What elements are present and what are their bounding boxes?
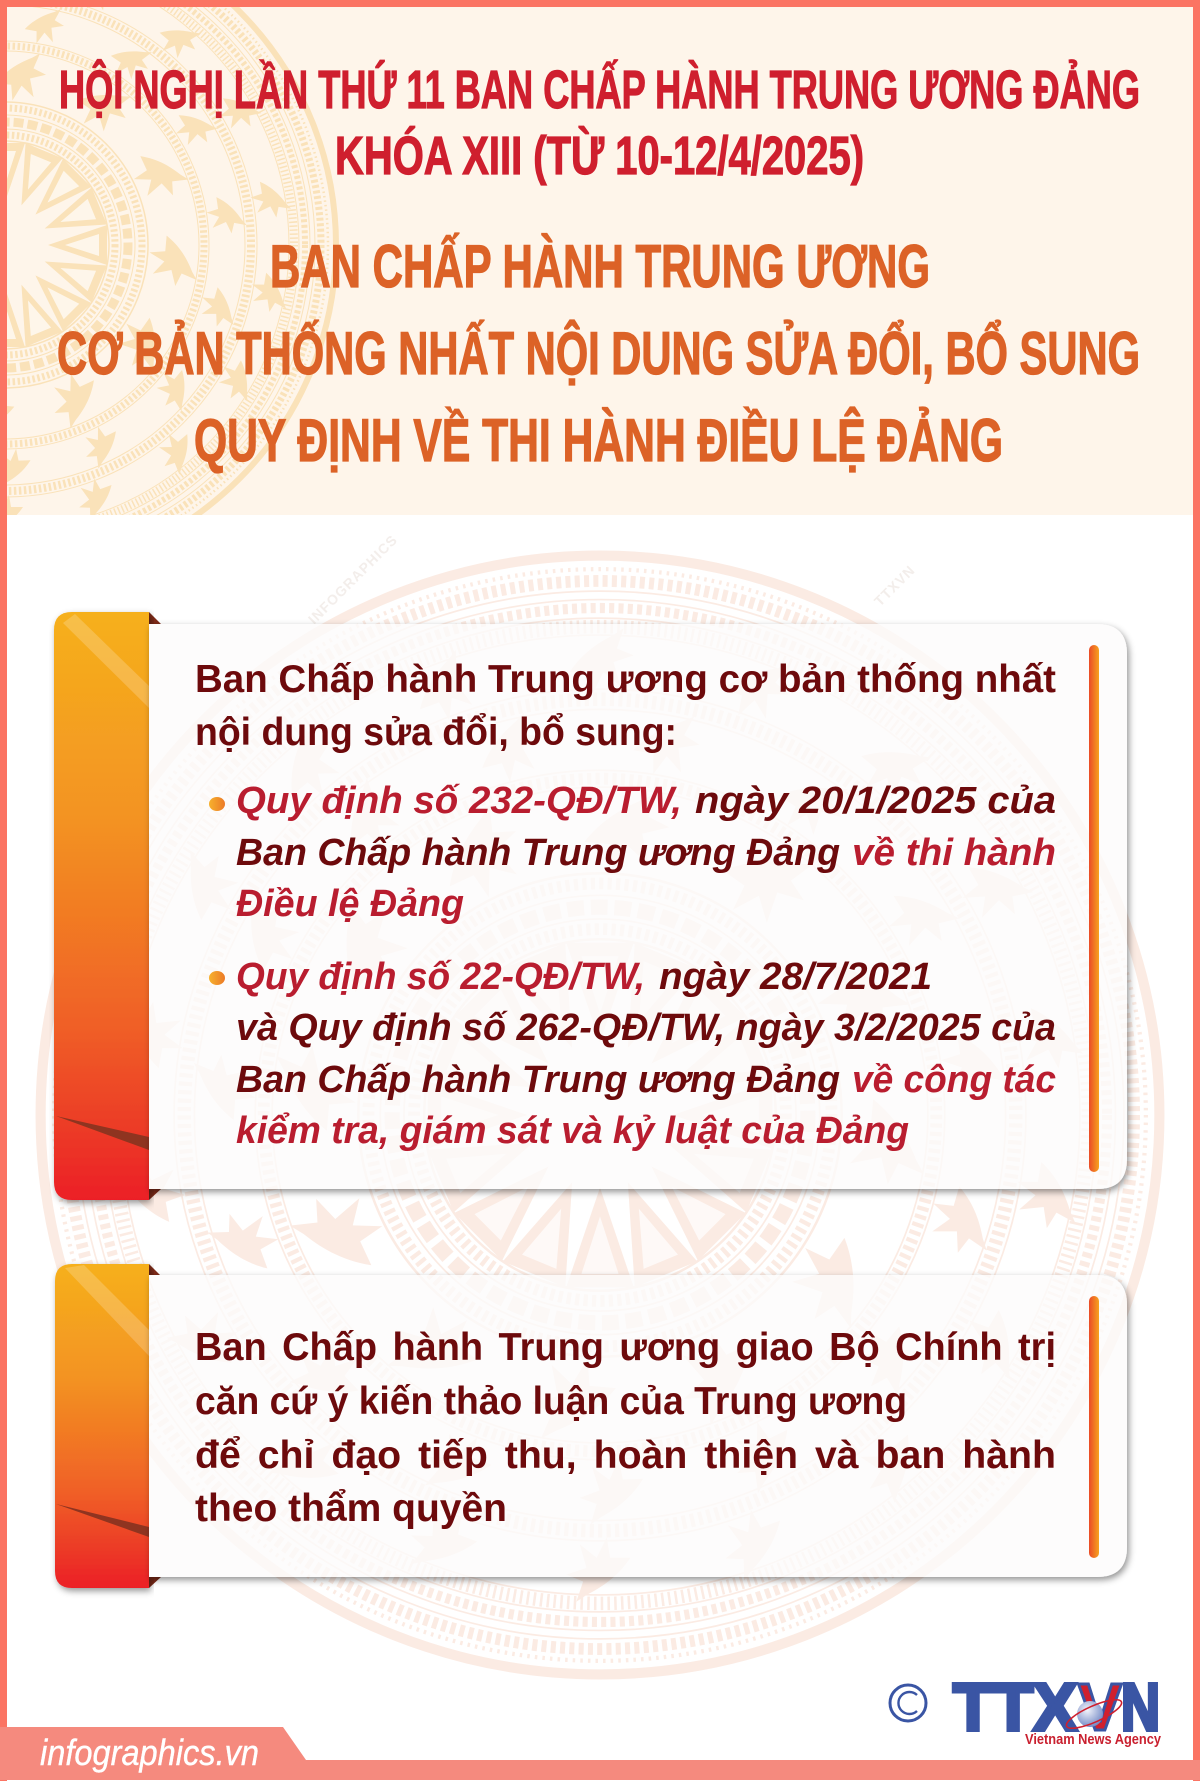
footer site name: infographics.vn — [40, 1732, 259, 1773]
card 2 text: để chỉ đạo tiếp thu, hoàn thiện và ban hành — [195, 1434, 1056, 1477]
card 2 text: Ban Chấp hành Trung ương giao Bộ Chính trị — [195, 1326, 1056, 1369]
heading: conference title — [59, 59, 1140, 186]
bullet 1 — [209, 797, 225, 811]
card 2 text — [195, 1326, 1056, 1530]
bullet 2 text: về công tác — [852, 1059, 1056, 1101]
bullet 1 text: Ban Chấp hành Trung ương Đảng — [236, 832, 840, 874]
card 2 side tab — [55, 1264, 161, 1588]
card 1 side tab — [54, 612, 161, 1200]
bullet 2 text: Quy định số 22-QĐ/TW, — [236, 956, 645, 998]
logo: TTXVN Vietnam News Agency: Vietnam News Agency — [1025, 1732, 1161, 1748]
bullet 1 text: Điều lệ Đảng — [236, 883, 464, 925]
panel: card 1 — [54, 612, 1127, 1200]
watermark labels — [305, 531, 918, 627]
logo: TTXVN Vietnam News Agency — [953, 1670, 1161, 1748]
heading: conference title: KHÓA XIII (TỪ 10-12/4/2025) — [335, 126, 864, 186]
card 1 intro text: Ban Chấp hành Trung ương cơ bản thống nhất — [195, 658, 1056, 701]
card 2 text: căn cứ ý kiến thảo luận của Trung ương — [195, 1380, 907, 1423]
bullet 2 text: kiểm tra, giám sát và kỷ luật của Đảng — [236, 1110, 909, 1152]
watermark labels: TTXVN — [871, 562, 918, 609]
card 1 intro text: nội dung sửa đổi, bổ sung: — [195, 711, 677, 754]
card 2 text: theo thẩm quyền — [195, 1487, 507, 1530]
card 1 white panel — [149, 624, 1127, 1189]
bullet 2 — [209, 971, 225, 985]
bullet 1 text: Quy định số 232-QĐ/TW, — [236, 780, 682, 822]
watermark: bronze drum behind the cards — [41, 556, 1159, 1674]
watermark: faint drum showing through the card panels — [1110, 1170, 1127, 1298]
bullet 2 text: ngày 28/7/2021 — [659, 956, 932, 998]
heading: main headline — [57, 233, 1140, 474]
heading: main headline: BAN CHẤP HÀNH TRUNG ƯƠNG — [270, 233, 930, 300]
logo: TTXVN Vietnam News Agency: N — [1121, 1670, 1160, 1745]
panel: card 2 — [55, 1264, 1127, 1588]
card 1 accent bar — [1089, 645, 1099, 1172]
bullet 1 text: ngày 20/1/2025 của — [695, 780, 1056, 822]
bullet 2 text: Ban Chấp hành Trung ương Đảng — [236, 1059, 840, 1101]
logo: TTXVN Vietnam News Agency: TTX — [953, 1670, 1077, 1745]
footer band — [0, 1727, 1200, 1780]
bullet 1 text — [236, 780, 1056, 925]
panel: header background with drum — [7, 7, 1193, 515]
bullet 2 text: và Quy định số 262-QĐ/TW, ngày 3/2/2025 của — [236, 1007, 1056, 1049]
bullet 2 text — [236, 956, 1056, 1152]
card 1 intro text — [195, 658, 1056, 754]
bullet 1 text: về thi hành — [852, 832, 1056, 874]
icon: copyright symbol — [890, 1685, 926, 1721]
card 2 white panel — [149, 1275, 1127, 1577]
logo: TTXVN Vietnam News Agency: V — [1078, 1670, 1122, 1745]
card 2 accent bar — [1089, 1296, 1099, 1558]
watermark labels: INFOGRAPHICS — [305, 531, 401, 627]
